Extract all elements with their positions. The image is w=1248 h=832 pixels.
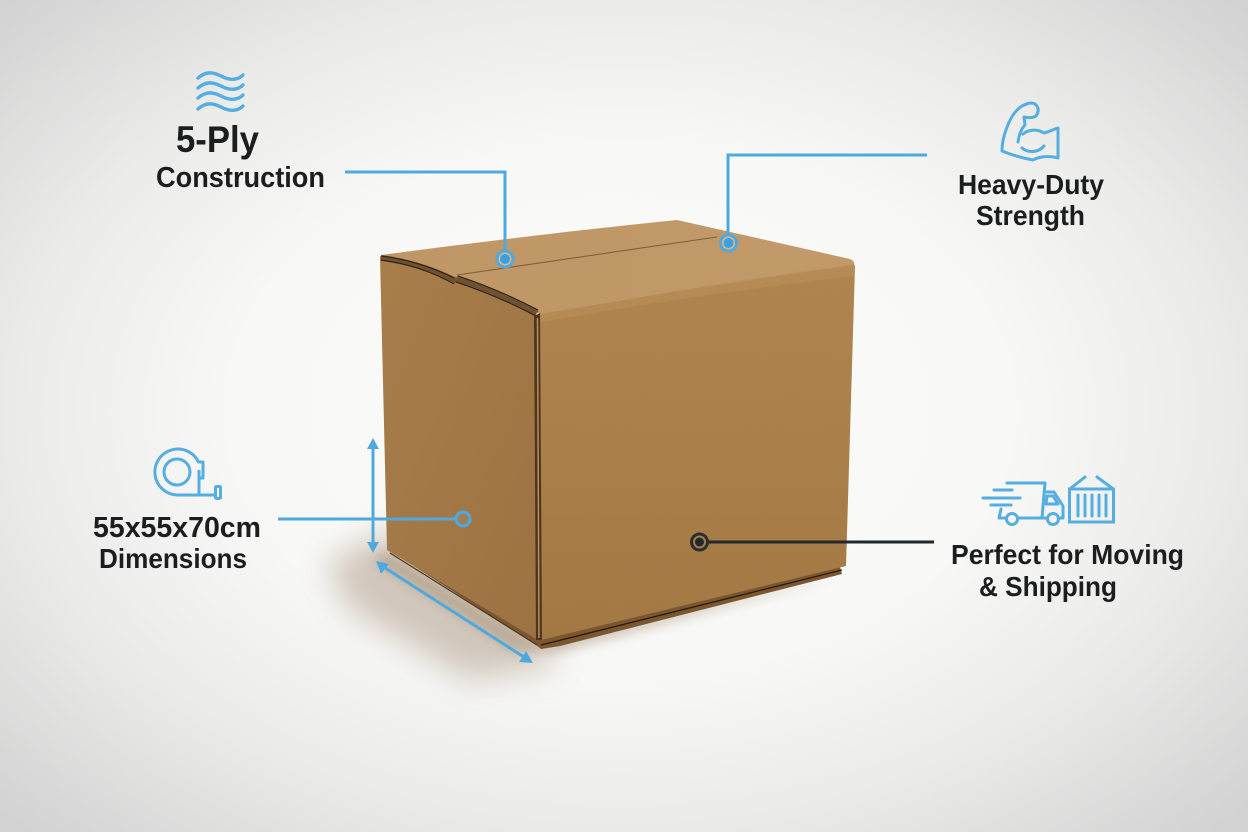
icon: delivery truck — [983, 483, 1063, 524]
callout: Dimensions — [93, 438, 533, 663]
heading: 5-Ply: 5-Ply — [176, 119, 259, 160]
callout: Moving and Shipping — [692, 477, 1184, 602]
box left face — [380, 256, 538, 640]
marker dot — [692, 534, 708, 550]
cardboard grain — [380, 256, 855, 640]
box top face — [381, 220, 854, 314]
leader line — [708, 540, 934, 544]
flap corrugated edge left — [381, 256, 538, 316]
label: and Shipping: & Shipping — [979, 571, 1117, 602]
icon: flexed arm — [1002, 103, 1058, 160]
leader line — [345, 172, 505, 251]
label: 55x55x70cm: 55x55x70cm — [93, 512, 261, 544]
icon: tape measure — [155, 449, 220, 498]
height arrow — [367, 438, 379, 553]
flap seam — [457, 237, 717, 275]
leader line — [728, 155, 927, 235]
box shadow — [325, 530, 842, 680]
box front face — [538, 262, 855, 640]
leader line — [278, 518, 456, 520]
depth arrow — [376, 561, 533, 663]
cardboard box — [380, 220, 855, 649]
marker dot — [456, 512, 470, 526]
icon: waves — [198, 73, 243, 110]
box front highlight — [540, 264, 854, 322]
label: Dimensions: Dimensions — [99, 543, 247, 574]
callout: 5-Ply Construction — [156, 73, 513, 267]
label: Strength: Strength — [976, 200, 1085, 231]
marker dot — [497, 251, 513, 267]
icon: shipping container — [1070, 477, 1114, 522]
label: Construction: Construction — [156, 162, 325, 194]
callout: Heavy-Duty Strength — [720, 103, 1104, 251]
box bottom edge — [389, 550, 842, 649]
label: Perfect for Moving: Perfect for Moving — [951, 539, 1184, 570]
front vertical corner — [534, 313, 542, 640]
marker dot — [720, 235, 736, 251]
label: Heavy-Duty: Heavy-Duty — [958, 169, 1104, 200]
